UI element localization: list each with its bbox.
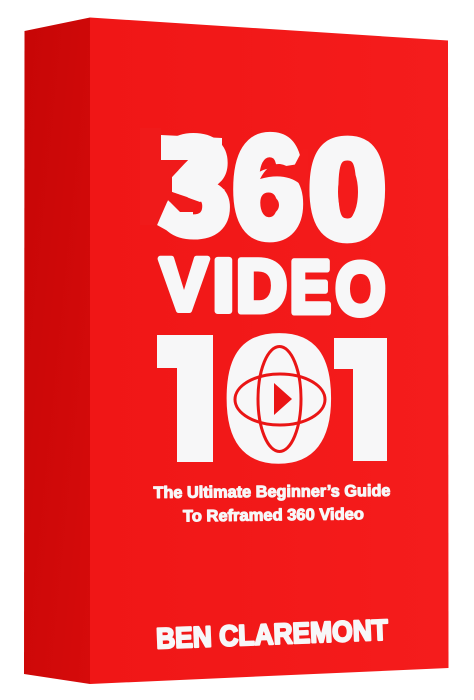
title word: VIDEO: O (335, 247, 385, 331)
subtitle (153, 482, 391, 525)
digit one, left (157, 335, 213, 462)
title word: VIDEO: V (160, 244, 208, 326)
title word: VIDEO: I (212, 245, 234, 327)
title word: VIDEO (160, 244, 385, 331)
author name: BEN CLAREMONT (156, 615, 389, 655)
title number: 101 with play icon (157, 333, 387, 464)
digit zero: 0 (222, 301, 336, 497)
title word: VIDEO: D (236, 246, 287, 328)
box front panel (90, 18, 448, 684)
digit one, left: 1 (146, 300, 246, 501)
box side panel (24, 18, 90, 684)
digit zero: 0 (309, 113, 386, 267)
digit three: 3 (158, 111, 230, 263)
subtitle: The Ultimate Beginner’s Guide (153, 482, 391, 502)
digit one, right (334, 338, 387, 461)
icon: 360 globe with play button (235, 346, 325, 452)
title word: VIDEO: E (290, 246, 331, 329)
digit six: 6 (233, 108, 303, 267)
title number: 360 (140, 108, 386, 267)
digit one, right: 1 (322, 303, 420, 499)
subtitle: To Reframed 360 Video (183, 505, 364, 525)
